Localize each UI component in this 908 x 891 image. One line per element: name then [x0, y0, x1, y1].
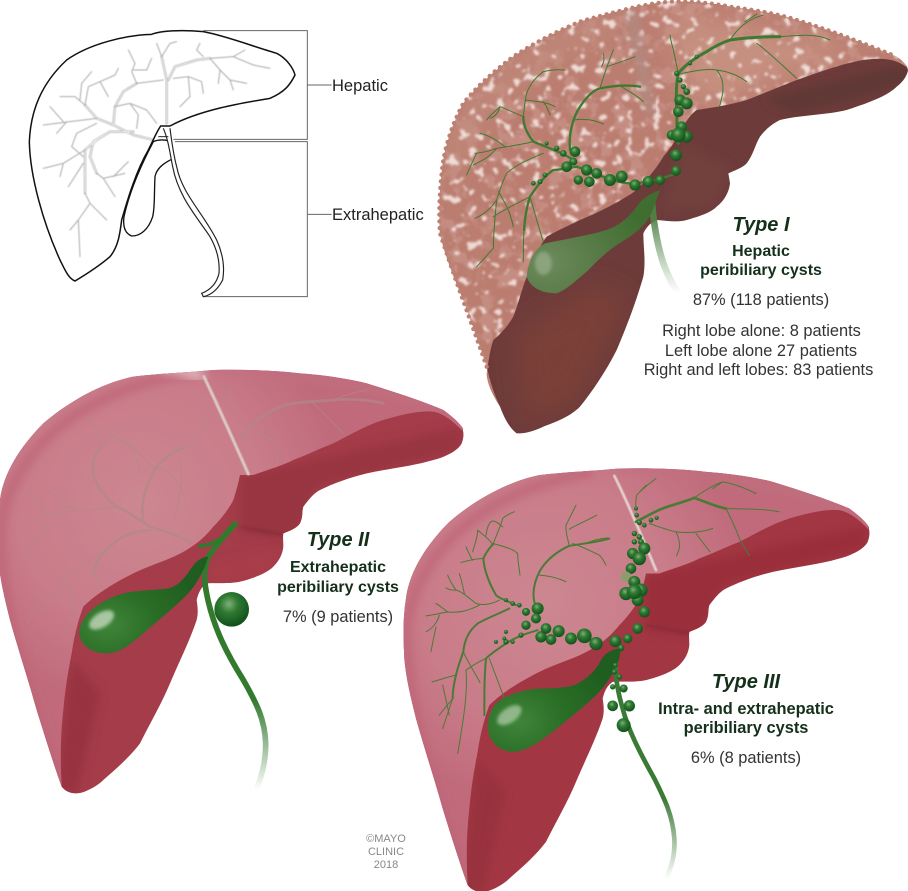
Type II extrahepatic cyst: [214, 592, 249, 627]
Type I gallbladder and duct: [527, 190, 678, 293]
diagram: line drawing of liver with hepatic and extrahepatic brackets: [29, 31, 424, 297]
Type I liver nodular surface: [430, 0, 908, 440]
Type I percentage: 87% (118 patients): [693, 291, 829, 309]
Type II subtitle: Extrahepatic: [290, 559, 386, 576]
Type I subtitle: peribiliary cysts: [700, 262, 822, 279]
Type III subtitle: peribiliary cysts: [684, 719, 808, 737]
copyright credit: 2018: [374, 859, 398, 871]
Type II heading: Type II: [307, 529, 370, 551]
Type III caption: [658, 671, 834, 767]
Type I bile duct tree: [467, 14, 830, 267]
Type II percentage: 7% (9 patients): [283, 608, 393, 626]
Type III liver surface: [403, 458, 876, 891]
Type III gallbladder and duct: [488, 648, 674, 878]
gallbladder: [124, 140, 172, 236]
brackets: [173, 31, 332, 297]
Type I scalloped nodular edge: [439, 2, 897, 367]
Type II liver illustration: [0, 360, 470, 800]
Type I lobe breakdown: Right lobe alone: 8 patients: [662, 322, 861, 340]
Type III cysts: [494, 506, 659, 732]
Type I liver illustration: [430, 0, 908, 440]
Type I heading: Type I: [732, 214, 790, 236]
Type I liver underside: [430, 0, 908, 440]
Type I cysts: [531, 55, 699, 191]
Type III subtitle: Intra- and extrahepatic: [658, 700, 834, 718]
Type II gallbladder and duct: [79, 524, 266, 790]
Type III liver illustration: [403, 458, 876, 891]
Type III fissure: [614, 476, 656, 570]
duct tree main tubes: [43, 42, 270, 257]
Type II liver surface: [0, 360, 470, 800]
Type III liver underside: [403, 458, 876, 891]
copyright credit: ©MAYO: [366, 833, 406, 845]
Type III bile duct tree: [426, 478, 779, 753]
liver outline: [29, 31, 295, 281]
common bile duct: [163, 128, 224, 297]
copyright credit: CLINIC: [368, 846, 404, 858]
Type I caption: [644, 214, 873, 379]
Type I lobe breakdown: Right and left lobes: 83 patients: [644, 361, 873, 379]
Type III heading: Type III: [712, 671, 781, 693]
label: Extrahepatic: Extrahepatic: [332, 206, 424, 224]
Type I subtitle: Hepatic: [732, 243, 790, 260]
Type III percentage: 6% (8 patients): [691, 749, 801, 767]
Type II caption: [277, 529, 399, 626]
Type II faint bile duct tree: [25, 387, 383, 623]
line drawing artwork: [29, 31, 332, 297]
label: Hepatic: Hepatic: [332, 77, 388, 95]
Type II fissure: [204, 377, 248, 474]
Type II subtitle: peribiliary cysts: [277, 579, 399, 596]
Type II liver underside: [0, 360, 470, 800]
Type I lobe breakdown: Left lobe alone 27 patients: [665, 342, 857, 360]
